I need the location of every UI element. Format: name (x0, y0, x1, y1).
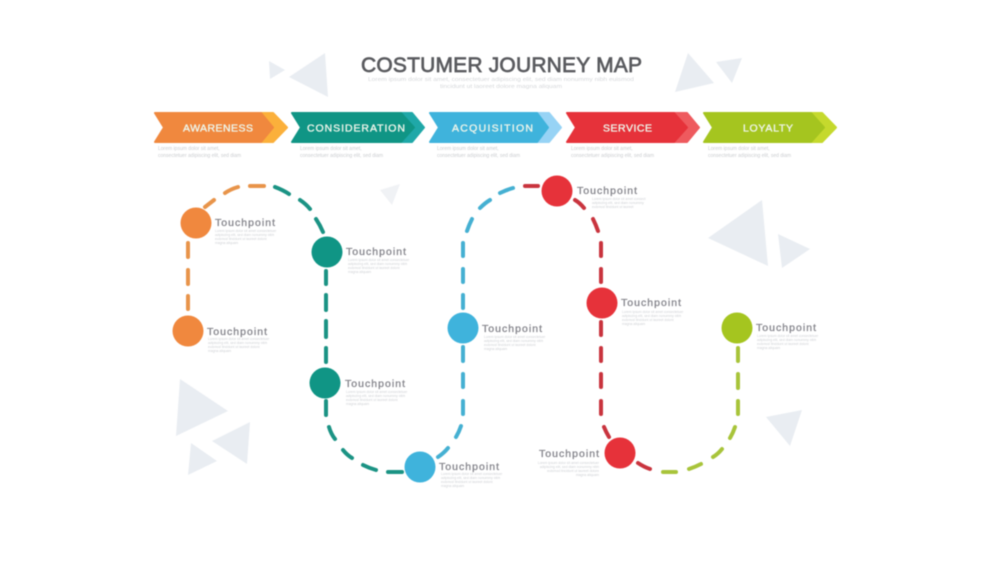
touchpoint: teal 1: euismod tincidunt ut laoreet dolore (348, 266, 400, 270)
touchpoint: red 1: Touchpoint (577, 185, 637, 197)
touchpoint: orange 2: Lorem ipsum dolor sit amet consectetuer (208, 337, 270, 341)
stage: loyalty: consectetuer adipiscing elit, sed diam (708, 153, 791, 159)
stage: service (567, 113, 699, 159)
touchpoint: red 2: magna aliquam (622, 322, 645, 326)
touchpoint: orange 1 (180, 208, 277, 245)
touchpoint: teal 1: adipiscing elit, sed diam nonummy nibh (348, 262, 407, 266)
stage: loyalty: Lorem ipsum dolor sit amet, (708, 146, 770, 152)
touchpoint: orange 1: adipiscing elit, sed diam nonummy nibh (215, 233, 274, 237)
dashed path: blue (438, 188, 513, 457)
touchpoint: blue 1 (404, 452, 503, 488)
dashed path: teal (275, 187, 402, 472)
decorative triangle: centre (380, 184, 400, 205)
decorative triangles: top left (269, 53, 328, 97)
touchpoint: teal 1: Touchpoint (346, 246, 406, 258)
touchpoint: red 1 (542, 176, 646, 209)
subtitle text: Lorem ipsum dolor sit amet, consectetuer adipiscing elit, sed diam nonummy nibh euismod (368, 77, 634, 83)
stage: consideration (292, 113, 424, 159)
touchpoint: orange 2 (172, 316, 270, 353)
touchpoint: green: adipiscing elit, sed diam nonummy nibh (757, 338, 816, 342)
stage: awareness: Lorem ipsum dolor sit amet, (158, 146, 220, 152)
touchpoint: orange 1: Touchpoint (215, 217, 275, 229)
dashed path: red (525, 186, 650, 469)
touchpoint: teal 2 (310, 368, 408, 406)
title: COSTUMER JOURNEY MAP (361, 54, 642, 77)
stage: acquisition: consectetuer adipiscing elit, sed diam (437, 153, 520, 159)
decorative triangles: top right (675, 53, 742, 92)
touchpoint: blue 1: Lorem ipsum dolor sit amet consectetuer (441, 472, 503, 476)
touchpoint: red 1: adipiscing elit, sed diam nonummy (592, 201, 644, 205)
stage: service: consectetuer adipiscing elit, sed diam (571, 153, 654, 159)
touchpoint: red 3 (538, 438, 636, 477)
touchpoint: blue 2: euismod tincidunt ut laoreet dolore (484, 343, 536, 347)
stage: acquisition: Lorem ipsum dolor sit amet, (437, 146, 499, 152)
stage: awareness (155, 113, 287, 159)
touchpoint: teal 2: adipiscing elit, sed diam nonummy nibh (346, 394, 405, 398)
touchpoint: red 3: magna aliquam (576, 473, 599, 477)
touchpoint: red 1: Lorem ipsum dolor sit amet consect (592, 197, 646, 201)
touchpoint: red 3: euismod tincidunt ut laoreet dolore (547, 469, 599, 473)
touchpoint: teal 1: Lorem ipsum dolor sit amet consectetuer (348, 258, 410, 262)
touchpoint: red 1: euismod tincidunt ut laoreet (592, 205, 634, 209)
decorative triangles: right (708, 200, 810, 446)
touchpoint: green (722, 312, 819, 350)
stage: consideration: Lorem ipsum dolor sit amet, (300, 146, 362, 152)
decorative triangles: bottom left (176, 379, 250, 475)
touchpoint: teal 2: euismod tincidunt ut laoreet dolore (346, 398, 398, 402)
touchpoint: orange 2: magna aliquam (208, 349, 231, 353)
touchpoint: teal 1 (312, 236, 410, 274)
stage: consideration: CONSIDERATION (307, 122, 405, 134)
touchpoint: orange 2: euismod tincidunt ut laoreet dolore (208, 345, 260, 349)
touchpoint: red 2 (586, 288, 684, 326)
touchpoint: orange 1: magna aliquam (215, 241, 238, 245)
touchpoint: blue 2: magna aliquam (484, 347, 507, 351)
touchpoint: teal 2: Lorem ipsum dolor sit amet consectetuer (346, 390, 408, 394)
subtitle text (368, 77, 634, 90)
stage: loyalty: LOYALTY (743, 122, 793, 134)
touchpoint: orange 1: euismod tincidunt ut laoreet dolore (215, 237, 267, 241)
touchpoint: orange 2: adipiscing elit, sed diam nonummy nibh (208, 341, 267, 345)
touchpoint: teal 1: magna aliquam (348, 270, 371, 274)
subtitle text: tincidunt ut laoreet dolore magna aliquam (440, 84, 562, 90)
touchpoint: red 2: Touchpoint (621, 297, 681, 309)
touchpoint: blue 1: euismod tincidunt ut laoreet dolore (441, 480, 493, 484)
touchpoint: blue 1: Touchpoint (439, 461, 499, 473)
touchpoint: blue 1: adipiscing elit, sed diam nonummy nibh (441, 476, 500, 480)
stage: awareness: AWARENESS (183, 122, 253, 134)
stage: service: Lorem ipsum dolor sit amet, (571, 146, 633, 152)
touchpoint: blue 1: magna aliquam (441, 484, 464, 488)
touchpoint: green: Lorem ipsum dolor sit amet consectetuer (757, 334, 819, 338)
touchpoint: orange 2: Touchpoint (207, 326, 267, 338)
touchpoint: red 3: Touchpoint (539, 448, 599, 460)
dashed path: orange (188, 186, 264, 309)
stage: awareness: consectetuer adipiscing elit, sed diam (158, 153, 241, 159)
stage: acquisition (430, 113, 561, 159)
stage: acquisition: ACQUISITION (452, 122, 533, 134)
stage: service: SERVICE (603, 122, 652, 134)
touchpoint: red 2: adipiscing elit, sed diam nonummy nibh (622, 314, 681, 318)
touchpoint: blue 2 (448, 312, 546, 351)
touchpoint: green: magna aliquam (757, 346, 780, 350)
touchpoint: red 3: adipiscing elit, sed diam nonummy nibh (540, 465, 599, 469)
touchpoint: green: euismod tincidunt ut laoreet dolore (757, 342, 809, 346)
stage: loyalty (704, 113, 836, 159)
stage: consideration: consectetuer adipiscing elit, sed diam (300, 153, 383, 159)
touchpoint: blue 2: adipiscing elit, sed diam nonummy nibh (484, 339, 543, 343)
dashed path: green (663, 348, 738, 472)
touchpoint: red 2: euismod tincidunt ut laoreet dolore (622, 318, 674, 322)
touchpoint: red 3: Lorem ipsum dolor sit amet consectetuer (538, 461, 600, 465)
touchpoint: teal 2: magna aliquam (346, 402, 369, 406)
touchpoint: red 2: Lorem ipsum dolor sit amet consectetuer (622, 310, 684, 314)
touchpoint: teal 2: Touchpoint (345, 378, 405, 390)
touchpoint: orange 1: Lorem ipsum dolor sit amet consectetuer (215, 229, 277, 233)
touchpoint: blue 2: Lorem ipsum dolor sit amet consectetuer (484, 335, 546, 339)
touchpoint: blue 2: Touchpoint (482, 323, 542, 335)
touchpoint: green: Touchpoint (756, 322, 816, 334)
